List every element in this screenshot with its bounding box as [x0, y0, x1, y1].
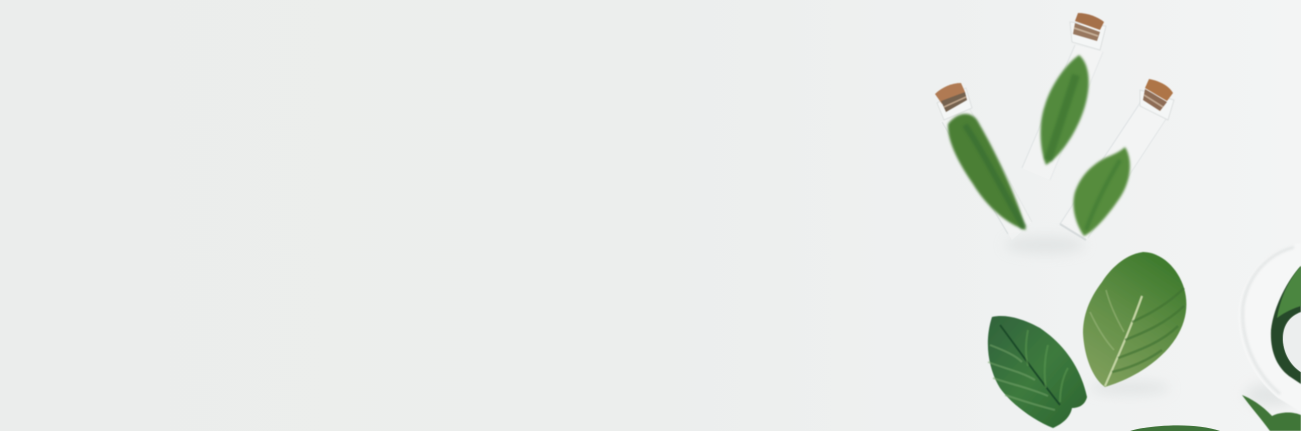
cork [1073, 13, 1104, 41]
leaf in vial [1041, 55, 1089, 165]
vial: left with long leaf [935, 83, 1032, 240]
pestle [1283, 313, 1301, 372]
large mint leaf [1083, 252, 1186, 387]
vial: right with small leaf [1060, 79, 1174, 240]
bottom edge leaf [1130, 425, 1220, 431]
dark mint leaf [988, 316, 1087, 428]
leaf in vial [1073, 147, 1130, 236]
mint inside the mortar [1271, 266, 1301, 384]
vial: centre with leaf [1022, 13, 1106, 180]
leaf in vial [948, 114, 1026, 230]
cork [1143, 79, 1173, 111]
soft shadows under vials and leaves [1005, 236, 1295, 407]
bottom right mint leaf [1242, 395, 1301, 431]
cork [935, 83, 967, 112]
marble mortar with mint and pestle [1238, 243, 1301, 412]
